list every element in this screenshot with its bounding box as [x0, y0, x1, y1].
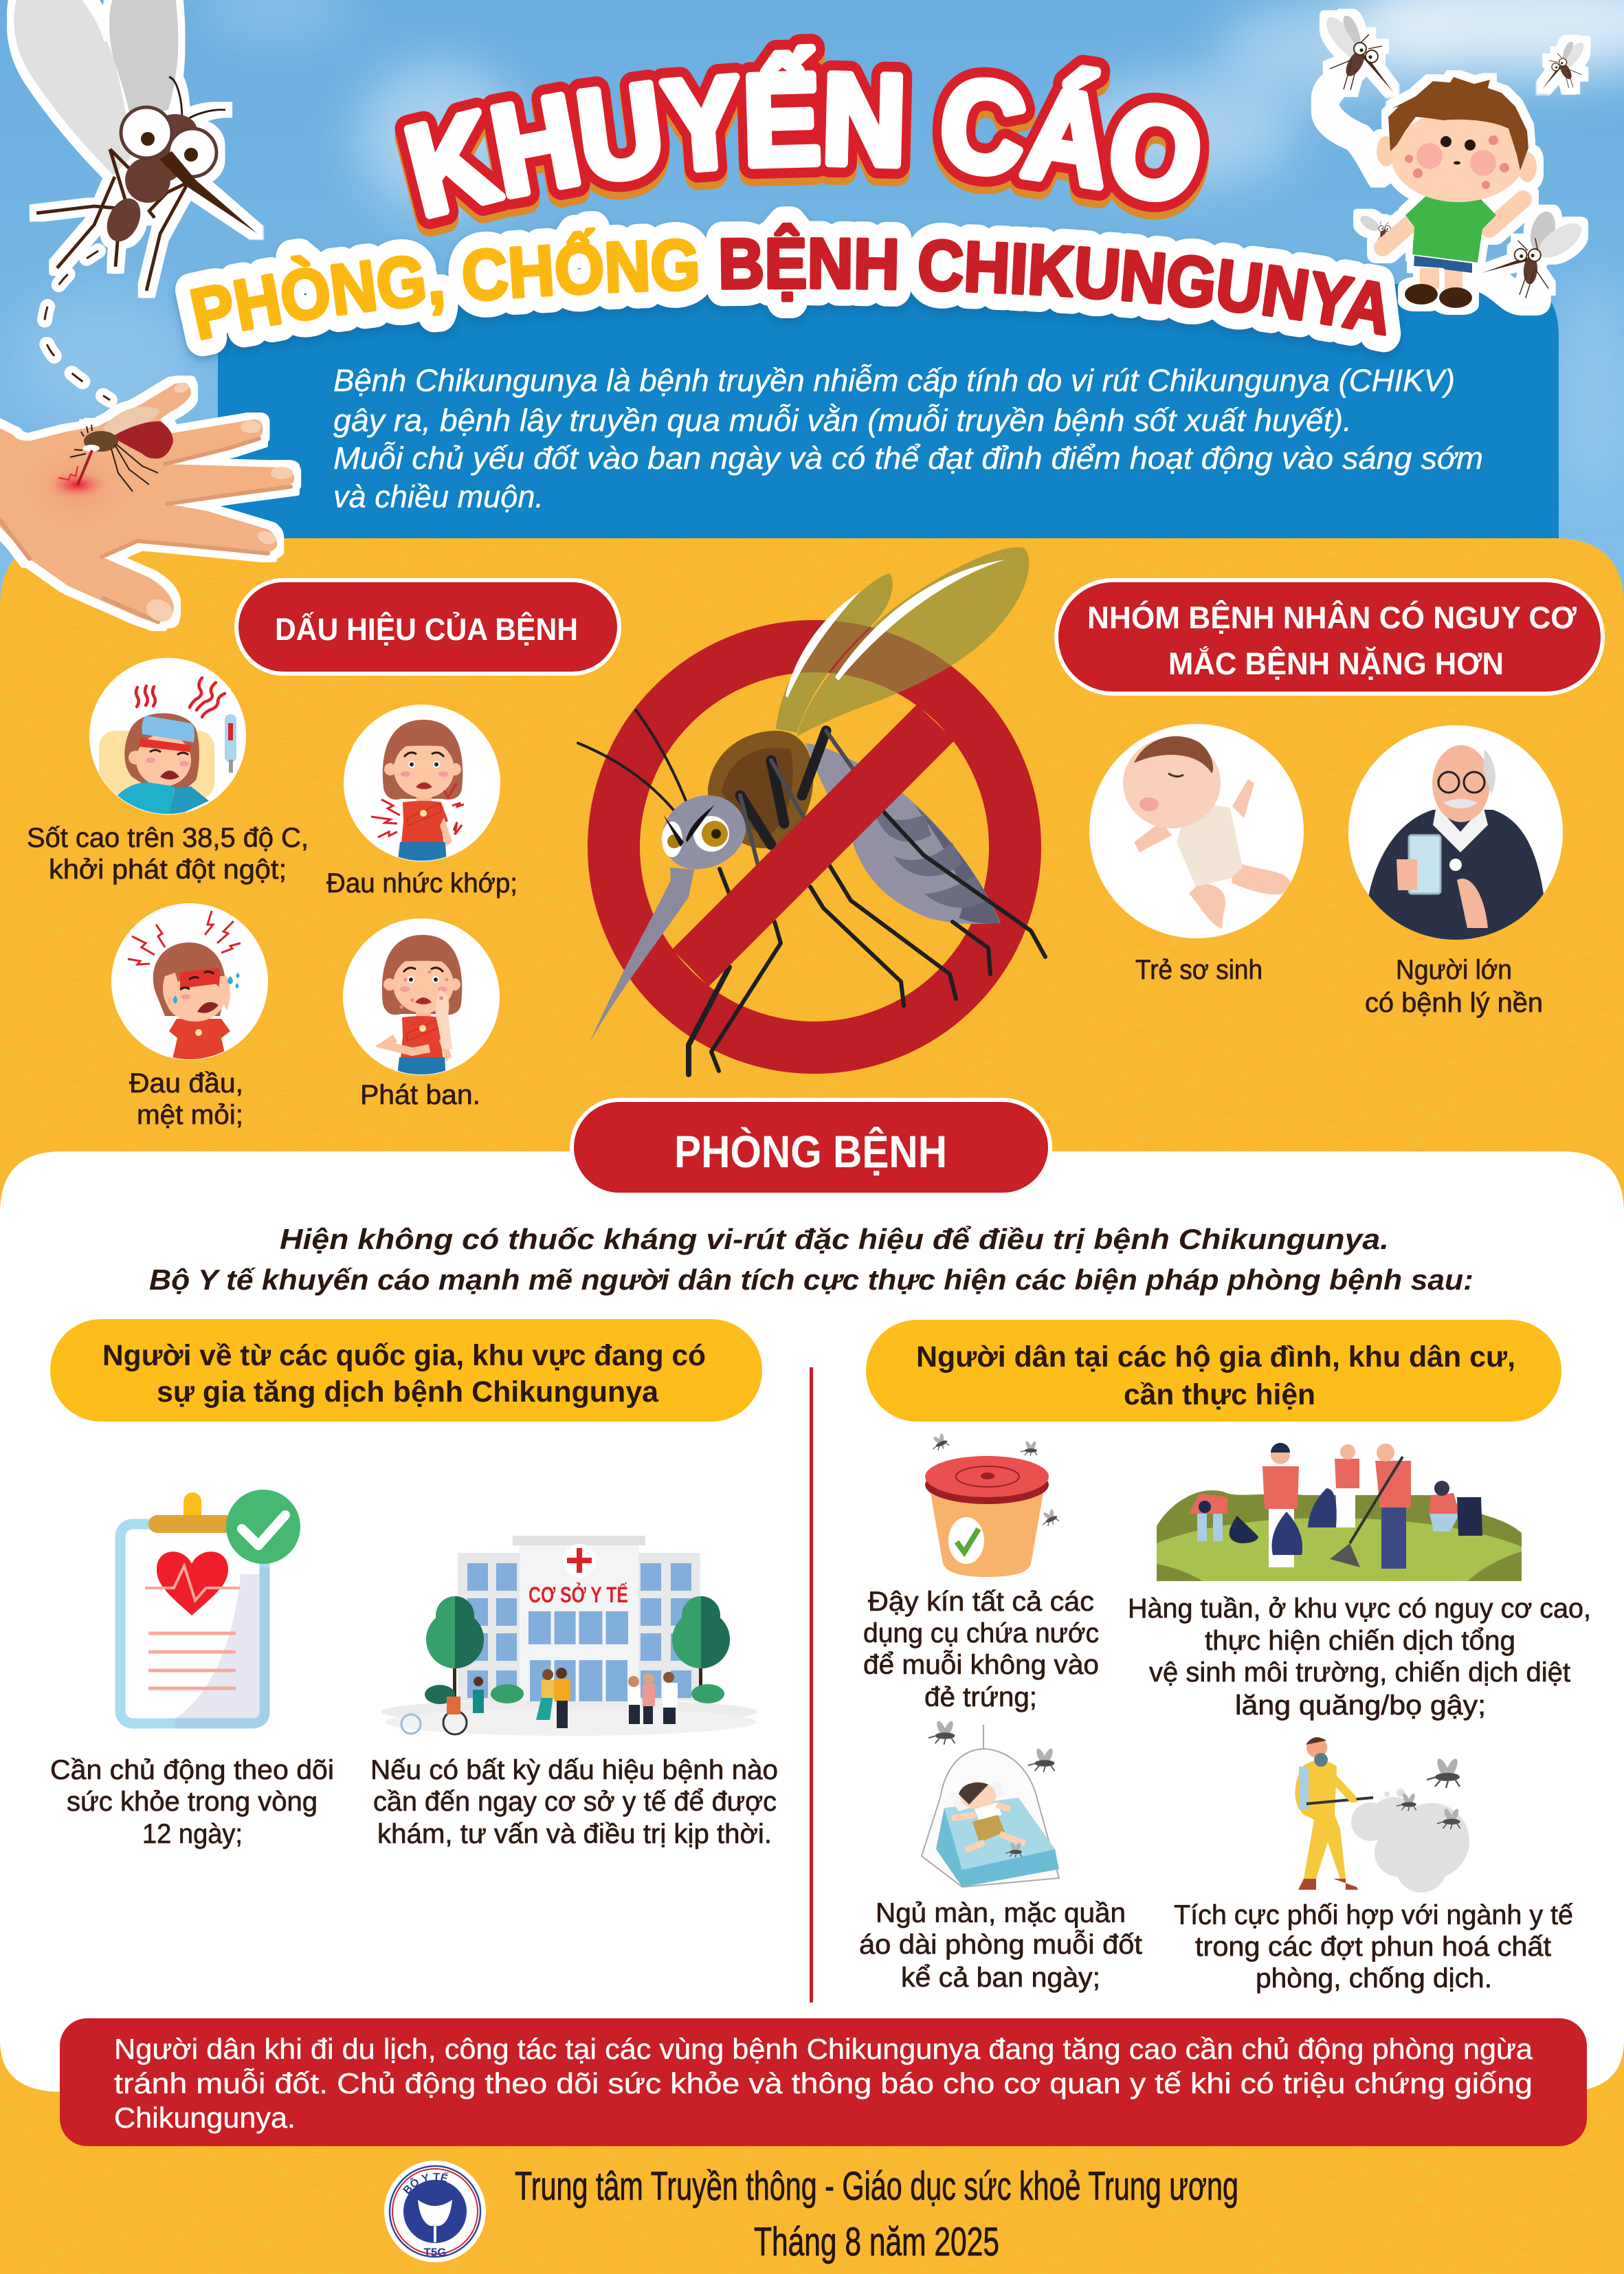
symptom label: fever: Sốt cao trên 38,5 độ C, [27, 823, 309, 853]
icon: covered water container [925, 1432, 1060, 1577]
symptom label: headache: mệt mỏi; [137, 1100, 243, 1130]
icon: clipboard with heart [120, 1490, 300, 1723]
text: spraying: phòng, chống dịch. [1256, 1963, 1492, 1994]
mosquito wings [776, 547, 1029, 736]
symptom label: fever [27, 823, 309, 885]
symptom label: headache [129, 1068, 243, 1130]
text: bed net: áo dài phòng muỗi đốt [859, 1929, 1142, 1960]
text: monitor health: sức khỏe trong vòng [67, 1787, 318, 1817]
heading: prevention [572, 1100, 1050, 1195]
risk labels: Người lớn [1396, 955, 1512, 985]
prohibition slash [672, 705, 955, 986]
symptom: rash [343, 918, 500, 1081]
text: cover containers: Đậy kín tất cả các [868, 1587, 1094, 1617]
mosquito head [590, 795, 746, 1043]
illustration: insecticide spraying [1295, 1737, 1469, 1892]
symptom label: joint pain: Đau nhức khớp; [326, 868, 518, 898]
column heading: households [866, 1320, 1561, 1422]
column heading: households: cần thực hiện [1124, 1378, 1315, 1411]
prevention lead text: Hiện không có thuốc kháng vi-rút đặc hiệu để điều trị bệnh Chikungunya. [280, 1223, 1389, 1255]
sky background [0, 0, 1624, 687]
heading: signs of disease [236, 580, 619, 674]
prohibition sign with mosquito [578, 547, 1045, 1074]
risk group: newborn [1089, 724, 1304, 938]
facility sign: CƠ SỞ Y TẾ [529, 1582, 628, 1607]
prevention lead text [149, 1223, 1473, 1296]
symptom label: rash: Phát ban. [360, 1080, 480, 1110]
prohibition ring [614, 646, 1015, 1048]
text: cover containers: dụng cụ chứa nước [863, 1618, 1099, 1648]
illustration: hand with mosquito [0, 381, 294, 626]
callout: travel advice [60, 2018, 1587, 2146]
risk labels: Trẻ sơ sinh [1135, 955, 1263, 985]
text: cover containers: để muỗi không vào [863, 1649, 1099, 1680]
text: visit health facility [370, 1755, 778, 1849]
text: weekly campaign: thực hiện chiến dịch tổng [1205, 1626, 1515, 1656]
column heading: returning travellers: sự gia tăng dịch bệnh Chikungunya [157, 1376, 659, 1409]
risk labels: có bệnh lý nền [1365, 988, 1543, 1018]
symptom: fever [89, 658, 246, 818]
symptom label: headache: Đau đầu, [129, 1068, 243, 1099]
title: KHUYẾN CÁO: KHUYẾN CÁO [404, 44, 1200, 219]
illustration: sleeping under bed net [922, 1720, 1059, 1887]
text: bed net: Ngủ màn, mặc quần [876, 1898, 1126, 1928]
symptom: headache [111, 903, 268, 1062]
callout: travel advice: Chikungunya. [114, 2101, 296, 2134]
prevention lead text: Bộ Y tế khuyến cáo mạnh mẽ người dân tích cực thực hiện các biện pháp phòng bệnh sau: [149, 1263, 1473, 1296]
text: weekly campaign: Hàng tuần, ở khu vực có nguy cơ cao, [1128, 1593, 1591, 1624]
mosquito legs behind slash [578, 710, 1045, 1074]
text: bed net: kể cả ban ngày; [901, 1963, 1100, 1993]
callout: travel advice: Người dân khi đi du lịch, công tác tại các vùng bệnh Chikungunya đang tăng cao cần chủ động phòng ngừa [114, 2033, 1533, 2065]
footer text [515, 2164, 1238, 2264]
title: KHUYẾN CÁO: KHUYẾN CÁO [394, 34, 1210, 230]
panel: intro blue [218, 284, 1559, 543]
heading: prevention: PHÒNG BỆNH [674, 1126, 947, 1177]
text: weekly campaign: lăng quăng/bọ gậy; [1235, 1690, 1486, 1721]
people [401, 1668, 678, 1734]
text: visit health facility: Nếu có bất kỳ dấu hiệu bệnh nào [370, 1755, 778, 1785]
panel: yellow background [0, 538, 1624, 2274]
subtitle: PHÒNG, CHỐNG BỆNH CHIKUNGUNYA: PHÒNG, CHỐNG BỆNH CHIKUNGUNYA [190, 223, 1386, 340]
text: visit health facility: khám, tư vấn và điều trị kịp thời. [377, 1819, 772, 1849]
risk group: older adult [1348, 725, 1563, 942]
heading: high risk groups [1056, 580, 1603, 694]
text: bed net [859, 1898, 1142, 1993]
column divider [810, 1367, 813, 2002]
heading: signs of disease: DẤU HIỆU CỦA BỆNH [275, 612, 578, 647]
footer text: Trung tâm Truyền thông - Giáo dục sức khoẻ Trung ương [515, 2164, 1238, 2209]
footer text: Tháng 8 năm 2025 [754, 2220, 999, 2264]
text: spraying [1174, 1900, 1573, 1994]
risk labels [1135, 955, 1543, 1018]
intro text [333, 363, 1483, 514]
intro text: gây ra, bệnh lây truyền qua muỗi vằn (muỗi truyền bệnh sốt xuất huyết). [333, 403, 1352, 438]
logo: Ministry of Health: T5G [423, 2246, 447, 2259]
callout: travel advice: tránh muỗi đốt. Chủ động theo dõi sức khỏe và thông báo cho cơ quan y tế khi có triệu chứng giống [114, 2067, 1533, 2099]
text: cover containers [863, 1587, 1099, 1712]
column heading: returning travellers: Người về từ các quốc gia, khu vực đang có [102, 1339, 706, 1372]
illustration: mosquito top left [14, 0, 258, 291]
dashed flight path left [44, 251, 110, 400]
panel: prevention white [0, 1151, 1624, 2092]
symptom: joint pain [344, 705, 500, 865]
text: spraying: Tích cực phối hợp với ngành y tế [1174, 1900, 1573, 1930]
column heading: returning travellers [50, 1319, 762, 1422]
text: monitor health: Cần chủ động theo dõi [50, 1755, 334, 1785]
column heading: households: Người dân tại các hộ gia đình, khu dân cư, [916, 1340, 1515, 1373]
text: monitor health: 12 ngày; [142, 1819, 243, 1849]
heading: high risk groups: MẮC BỆNH NẶNG HƠN [1168, 646, 1504, 681]
symptom label: fever: khởi phát đột ngột; [49, 854, 287, 885]
intro text: Bệnh Chikungunya là bệnh truyền nhiễm cấp tính do vi rút Chikungunya (CHIKV) [333, 363, 1455, 398]
text: spraying: trong các đợt phun hoá chất [1195, 1932, 1551, 1962]
trees [425, 1596, 730, 1704]
heading: high risk groups: NHÓM BỆNH NHÂN CÓ NGUY CƠ [1087, 600, 1577, 635]
illustration: boy with mosquitoes [1324, 16, 1587, 309]
mosquito abdomen and body [708, 731, 1001, 924]
text: cover containers: đẻ trứng; [924, 1682, 1037, 1712]
text: weekly campaign: vệ sinh môi trường, chiến dịch diệt [1149, 1657, 1570, 1688]
illustration: health facility [381, 1536, 757, 1736]
logo: Ministry of Health: BỘ Y TẾ [403, 2172, 449, 2194]
subtitle: PHÒNG, CHỐNG BỆNH CHIKUNGUNYA: PHÒNG, CHỐNG BỆNH CHIKUNGUNYA [173, 206, 1402, 363]
title: KHUYẾN CÁO: KHUYẾN CÁO [394, 52, 1210, 236]
text: monitor health [50, 1755, 334, 1849]
intro text: và chiều muộn. [333, 479, 544, 514]
text: visit health facility: cần đến ngay cơ sở y tế để được [373, 1787, 777, 1817]
illustration: community cleanup [1157, 1443, 1522, 1581]
logo: Ministry of Health [384, 2161, 486, 2262]
text: weekly campaign [1128, 1593, 1591, 1721]
intro text: Muỗi chủ yếu đốt vào ban ngày và có thể đạt đỉnh điểm hoạt động vào sáng sớm [333, 441, 1483, 476]
